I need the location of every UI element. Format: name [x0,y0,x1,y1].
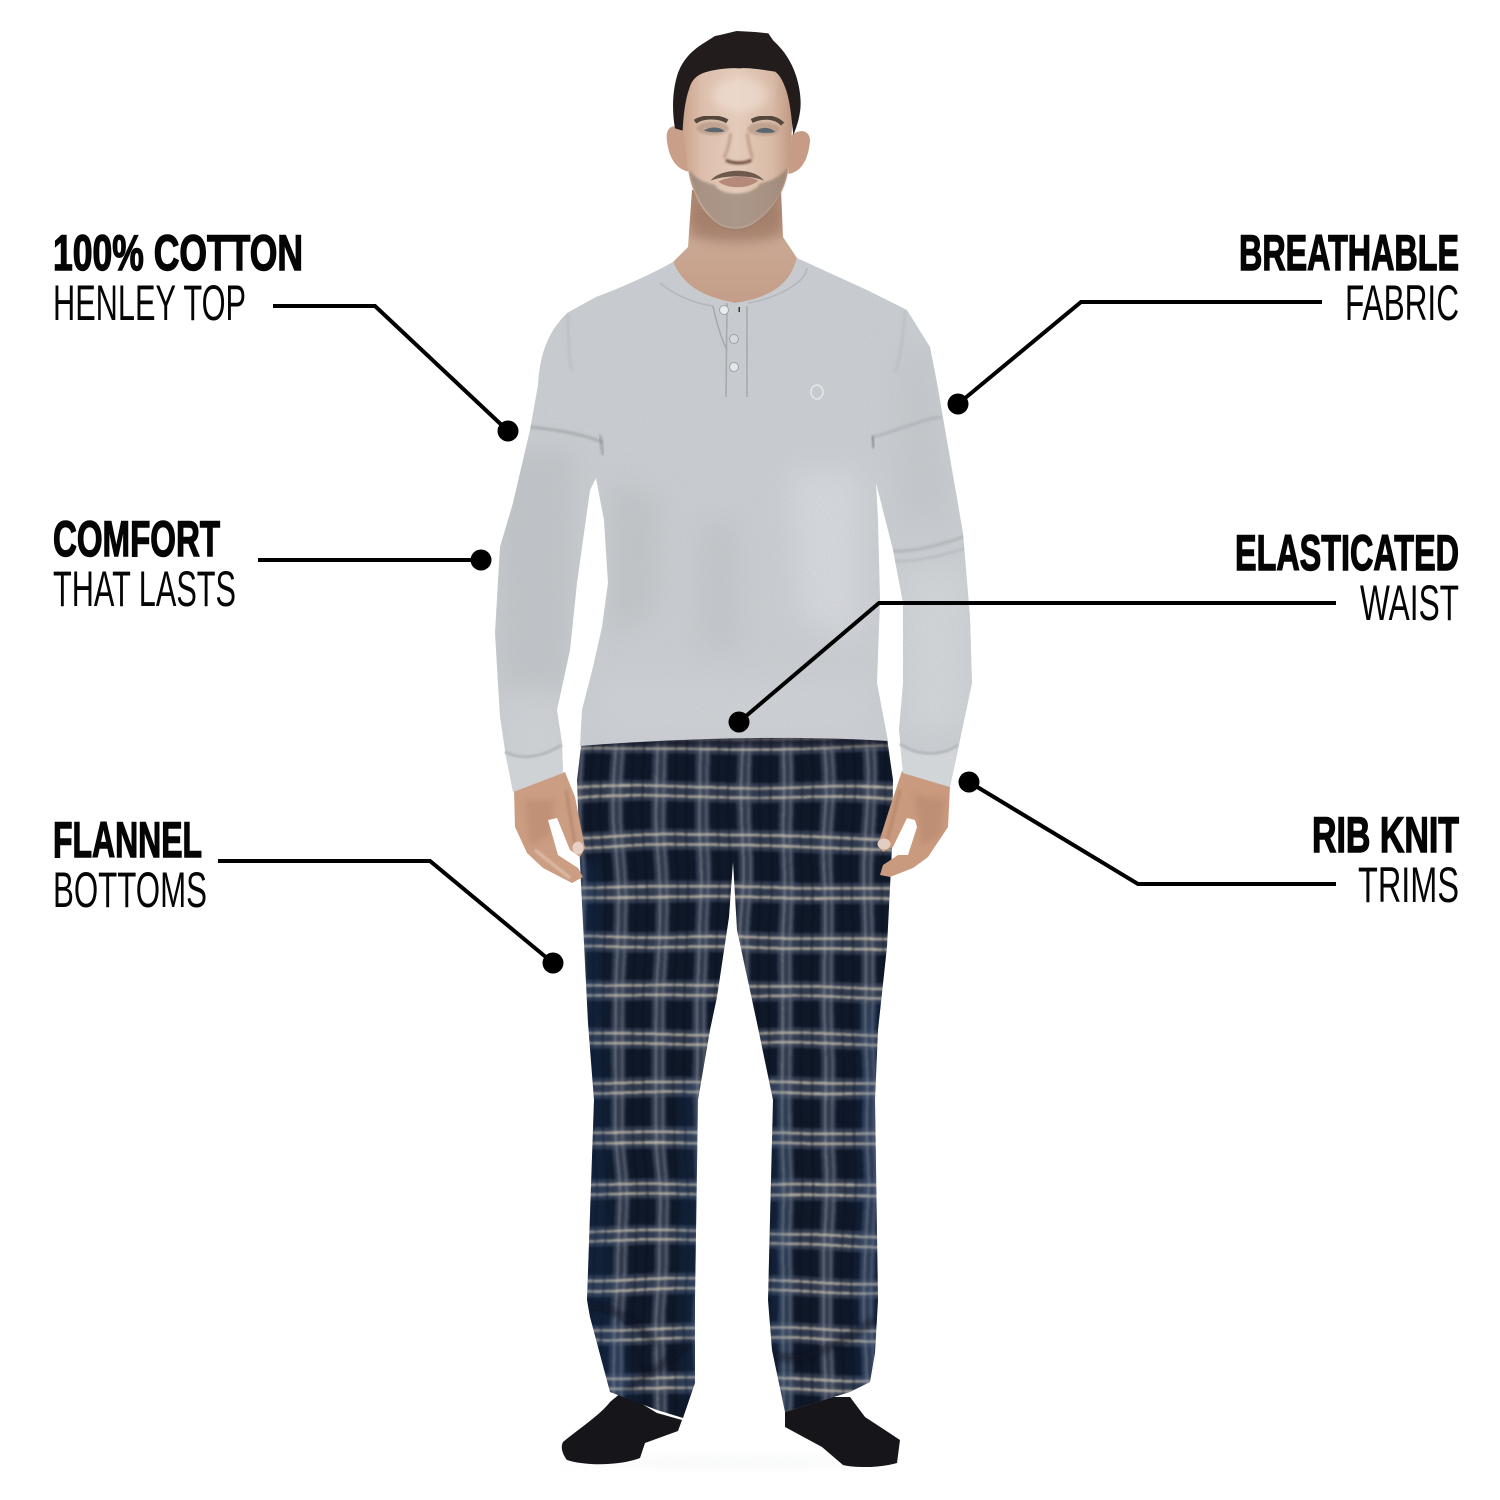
hair [673,31,801,135]
ears [667,126,810,174]
hem folds [590,1305,875,1390]
callout: comfort that lasts [53,511,492,617]
floor shadow [560,1456,900,1468]
waist shadow [576,736,896,746]
nose [724,133,753,163]
callout: breathable fabric [948,225,1459,414]
marker dot [728,712,750,732]
crotch shadow [728,760,738,870]
neck [673,190,797,303]
marker dot [470,550,492,570]
icon: right sock [785,1397,900,1467]
icon: left sock [562,1392,682,1464]
callout: elasticated waist [728,525,1459,732]
marker dot [498,420,518,442]
callout: 100% cotton henley top [53,225,518,442]
leader line [218,861,553,963]
leader line [969,782,1336,884]
marker dot [948,394,968,414]
shirt shading and folds [490,250,980,795]
subheading: HENLEY TOP [53,275,246,331]
leader line [273,306,508,431]
callout: flannel bottoms [53,812,564,974]
collar and placket [660,268,823,399]
leader line [958,302,1322,404]
marker dot [542,952,564,974]
marker dot [958,772,980,792]
moustache and mouth [711,171,764,187]
left hand [514,772,585,883]
leader line [739,603,1336,722]
subheading: THAT LASTS [53,561,236,617]
heading: COMFORT [53,511,220,567]
blue edge tint on legs [576,860,885,1410]
plaid flannel bottoms [577,738,893,1418]
forehead highlight [712,78,768,112]
rib knit cuffs [505,744,958,792]
eye shadows [697,122,779,136]
leader line [258,558,481,562]
stubble [689,168,787,229]
henley top [490,250,980,795]
eyebrows [695,117,783,124]
callout: rib knit trims [958,772,1459,913]
heading: 100% COTTON [53,225,303,281]
head [667,31,810,229]
heading: FLANNEL [53,812,202,868]
right hand [878,771,950,877]
figure: man in henley top and flannel pyjama bottoms [490,31,980,1468]
face [682,50,792,229]
subheading: BOTTOMS [53,862,207,918]
eyes [704,127,775,133]
